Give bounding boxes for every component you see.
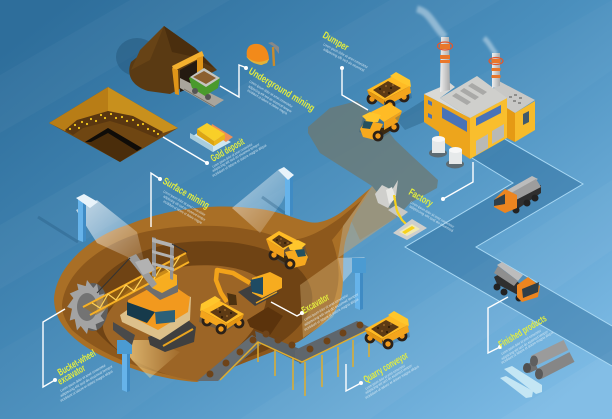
gold deposit pit bbox=[49, 87, 178, 162]
factory shadow bbox=[395, 100, 424, 130]
pit ring bbox=[62, 200, 362, 380]
label: quarry conveyor: Quarry conveyor bbox=[362, 350, 410, 386]
bucket wheel bbox=[67, 280, 108, 334]
garage doors bbox=[476, 134, 488, 155]
label: finished products: Lorem ipsum dolor sit amet consectetur bbox=[500, 328, 542, 356]
truck with pipes lower bbox=[494, 262, 540, 302]
label: factory: Factory bbox=[406, 187, 435, 210]
digging hole bbox=[247, 307, 283, 335]
road over pit bbox=[338, 186, 397, 258]
pit floor bbox=[103, 265, 267, 381]
storage tanks bbox=[429, 136, 464, 168]
label: bucket-wheel excavator: Bucket-wheel bbox=[56, 348, 98, 379]
label: dumper bbox=[320, 30, 369, 72]
light tower 4 bbox=[352, 258, 366, 310]
icon: pickaxe bbox=[268, 42, 279, 66]
rails bbox=[180, 78, 224, 107]
mast bbox=[97, 237, 187, 293]
dump truck at conveyor bbox=[365, 311, 410, 349]
label: finished products bbox=[497, 313, 554, 365]
mine cart bbox=[189, 68, 220, 100]
label: quarry conveyor: adipiscing elit sed do eiusmod tempor bbox=[364, 363, 413, 395]
annex bbox=[490, 80, 535, 142]
label: surface mining: incididunt ut labore et dolore magna bbox=[162, 199, 203, 225]
label: excavator: Lorem ipsum dolor sit amet consectetur bbox=[304, 293, 349, 322]
main roof upper bbox=[440, 76, 507, 118]
smoke bbox=[417, 9, 496, 54]
label: factory: Lorem ipsum dolor sit amet consectetur bbox=[410, 200, 455, 229]
label: underground mining: adipiscing elit sed do eiusmod tempor bbox=[247, 84, 293, 114]
light tower 2 bbox=[262, 167, 294, 216]
conveyor bbox=[197, 321, 371, 396]
mountain bbox=[129, 26, 217, 94]
mine entrance bbox=[172, 51, 204, 95]
label: factory: adipiscing elit sed do eiusmod bbox=[408, 204, 454, 233]
label: gold deposit: adipiscing elit sed do eiusmod tempor bbox=[212, 142, 261, 173]
icon: helmet bbox=[246, 44, 269, 65]
label: finished products: Finished products bbox=[497, 313, 549, 351]
pit shaft bbox=[85, 128, 142, 162]
label: gold deposit: Lorem ipsum dolor sit amet consectetur bbox=[212, 142, 254, 169]
label: underground mining: Lorem ipsum dolor sit amet consectetur bbox=[248, 79, 294, 109]
light cones bbox=[76, 170, 365, 338]
label: excavator: Excavator bbox=[300, 292, 332, 317]
pit inner ring bbox=[85, 241, 312, 378]
label: bucket-wheel excavator: adipiscing elit sed do eiusmod tempor bbox=[60, 364, 114, 398]
excavator cab bbox=[252, 272, 282, 298]
label: quarry conveyor: Lorem ipsum dolor sit amet consectetur bbox=[364, 363, 406, 391]
label: factory bbox=[406, 187, 455, 233]
mountain shadow bbox=[116, 38, 158, 76]
label: gold deposit: incididunt ut labore et dolore magna aliqua bbox=[212, 143, 267, 178]
label: finished products: adipiscing elit sed do eiusmod tempor bbox=[500, 329, 549, 361]
open pit bbox=[54, 187, 372, 382]
ice-blue metal bars bbox=[500, 366, 542, 398]
label: finished products: incididunt ut labore et dolore magna aliqua bbox=[500, 331, 554, 365]
underground mine bbox=[116, 26, 279, 107]
label: dumper: adipiscing elit sed do eiusmod bbox=[323, 47, 365, 72]
body bbox=[120, 270, 191, 340]
boom bbox=[83, 253, 189, 315]
label: surface mining: Surface mining bbox=[160, 176, 211, 212]
dump truck under excavator bbox=[199, 296, 244, 334]
skylights bbox=[452, 83, 487, 105]
factory bbox=[395, 9, 535, 168]
truck with pipes upper bbox=[494, 176, 541, 214]
label: underground mining: Underground mining bbox=[246, 66, 316, 114]
haul road bbox=[308, 101, 438, 240]
tracks bbox=[113, 320, 196, 352]
label: dumper: Dumper bbox=[320, 30, 350, 54]
ore layer bbox=[65, 111, 163, 138]
label: bucket-wheel excavator bbox=[56, 348, 114, 403]
label: bucket-wheel excavator: incididunt ut labore et dolore magna aliqua bbox=[60, 369, 113, 403]
excavator tracks bbox=[238, 280, 279, 306]
chimney left bbox=[438, 37, 452, 92]
dump truck in pit bbox=[266, 231, 309, 269]
main right wall bbox=[470, 98, 507, 159]
connector lines bbox=[43, 65, 508, 391]
label: bucket-wheel excavator: Lorem ipsum dolor sit amet consectetur bbox=[60, 363, 107, 393]
label: surface mining: adipiscing elit sed do eiusmod tempor bbox=[162, 194, 207, 222]
lit floor patch bbox=[118, 340, 180, 378]
label: dumper: Lorem ipsum dolor sit amet consectetur bbox=[323, 42, 369, 70]
light tower 1 bbox=[38, 194, 98, 242]
label: quarry conveyor bbox=[362, 350, 420, 400]
excavator arm bbox=[216, 270, 250, 302]
main left wall bbox=[424, 94, 470, 159]
label: bucket-wheel excavator: excavator bbox=[56, 363, 88, 388]
label: underground mining: incididunt ut labore et dolore magna bbox=[246, 88, 288, 116]
label: surface mining: Lorem ipsum dolor sit amet consectetur bbox=[162, 189, 207, 217]
label: gold deposit: Gold deposit bbox=[209, 136, 247, 165]
main roof lower bbox=[424, 83, 470, 118]
finished pipes bbox=[523, 345, 572, 380]
excavator bbox=[216, 270, 282, 306]
light tower 3 bbox=[117, 340, 132, 392]
dump truck below bbox=[359, 103, 402, 141]
chimney right bbox=[489, 53, 503, 88]
label: quarry conveyor: incididunt ut labore et dolore magna aliqua bbox=[364, 364, 420, 400]
dump truck top bbox=[367, 72, 412, 110]
label: underground mining bbox=[246, 66, 316, 116]
smelting ladle and tray bbox=[375, 180, 427, 240]
label: excavator: incididunt ut labore et dolore magna aliqua bbox=[304, 297, 359, 332]
label: excavator: adipiscing elit sed do eiusmod tempor bbox=[304, 292, 360, 327]
gold bars icon bbox=[190, 123, 233, 152]
bucket-wheel excavator bbox=[67, 237, 196, 352]
delivery road bbox=[405, 138, 612, 366]
windows bbox=[442, 107, 467, 132]
